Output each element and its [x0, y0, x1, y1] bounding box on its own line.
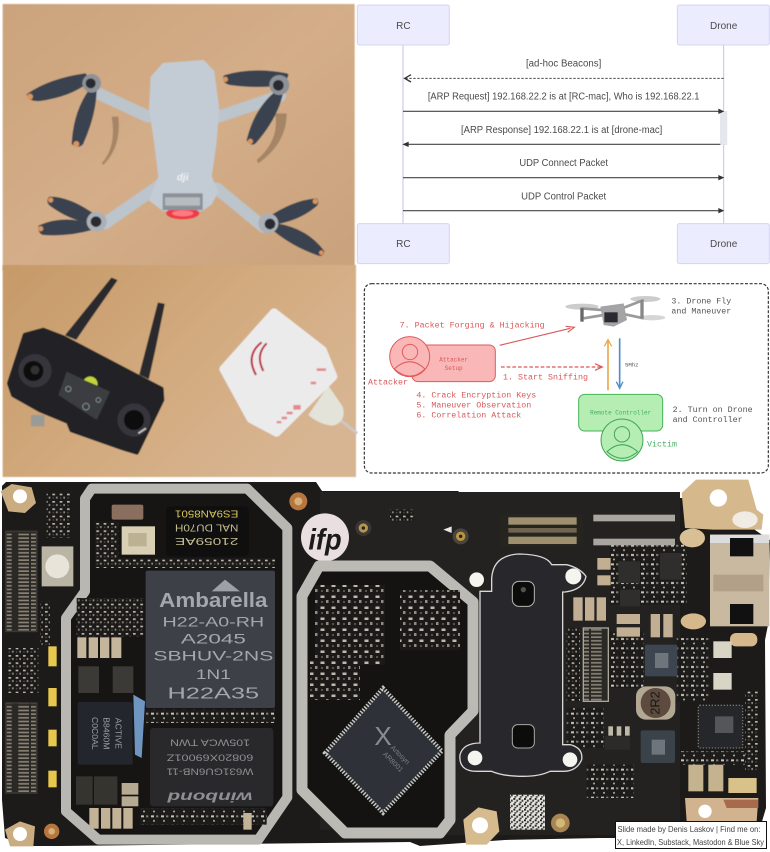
joystick left — [18, 354, 52, 387]
attack steps: 6. Correlation Attack — [416, 411, 521, 421]
message: ARP request: [ARP Request] 192.168.22.2 is at [RC-mac], Who is 192.168.22.1 — [428, 92, 700, 103]
small chips top — [618, 553, 682, 606]
Winbond chip: 60820X69001Z — [166, 752, 253, 762]
photo: circuit board — [1, 480, 770, 846]
attack steps — [416, 390, 536, 421]
rubber thermal pad with outline — [460, 554, 586, 776]
power chip 1 — [645, 645, 677, 676]
SMD fields — [390, 510, 758, 798]
router logo — [252, 342, 267, 375]
SMD field inside frame 2 — [310, 585, 460, 700]
photo: drone on wooden table — [3, 4, 355, 271]
mini drone — [565, 296, 665, 327]
label: turn on: and Controller — [673, 415, 743, 425]
shield frame 2 — [302, 566, 473, 833]
attack steps: 5. Maneuver Observation — [416, 401, 531, 411]
label: turn on — [673, 405, 753, 425]
QFP chip — [325, 688, 442, 813]
drone shadows — [102, 113, 287, 165]
RC top box: RC — [396, 21, 411, 32]
drone camera and LED — [163, 193, 203, 219]
label: victim: Victim — [647, 440, 677, 450]
Ambarella chip: H22-A0-RH — [162, 614, 264, 630]
message: ARP response: [ARP Response] 192.168.22.1 is at [drone-mac] — [461, 125, 663, 136]
top chip: NAL DU70H — [175, 522, 238, 533]
tan capacitor — [112, 505, 143, 520]
router vents — [277, 368, 326, 423]
sequence diagram — [357, 5, 769, 264]
Active-Semi chip: B8460M — [102, 717, 112, 749]
downlink arrow — [616, 338, 623, 388]
capacitors top — [573, 558, 673, 637]
router body — [223, 312, 333, 433]
Winbond chip: winbond — [167, 790, 252, 806]
top chip: ES9AN8501 — [174, 508, 238, 519]
right top gold tab — [680, 480, 763, 547]
left section — [1, 484, 371, 846]
crystal — [122, 526, 155, 555]
logo circle — [301, 513, 349, 561]
remote controller box — [579, 394, 663, 431]
dark copper right half tint — [320, 492, 680, 835]
Ambarella chip: A2045 — [181, 630, 246, 646]
white pads — [713, 641, 732, 690]
gold pads — [44, 492, 307, 839]
bottom right gold tab — [685, 798, 758, 821]
propellers — [28, 72, 323, 254]
tact button — [42, 546, 73, 586]
router cable — [340, 420, 357, 433]
gold pads right — [681, 613, 757, 646]
Active-Semi chip: ACTIVE — [113, 718, 123, 749]
QR data matrix — [510, 795, 545, 830]
yellow capacitors — [48, 646, 57, 787]
connector pad strips — [593, 515, 675, 545]
Drone bottom box: Drone — [710, 239, 738, 250]
message: UDP connect: UDP Connect Packet — [519, 158, 608, 169]
Ambarella chip: 1N1 — [196, 666, 231, 682]
attacker icon — [390, 337, 430, 377]
lifelines — [403, 43, 724, 225]
label: turn on: 2. Turn on Drone — [673, 405, 753, 415]
message: ARP response — [402, 125, 720, 147]
small power chips — [78, 666, 133, 693]
SOT chip — [605, 726, 630, 750]
logo circle: ifp — [308, 524, 342, 557]
uplink arrow — [604, 340, 612, 390]
bottom right capacitors — [688, 765, 757, 793]
controller body — [9, 330, 162, 452]
bottom mounting tab — [463, 807, 499, 845]
top chip: 21059AE — [174, 535, 238, 546]
sniffing arrow — [501, 364, 602, 370]
board-to-board connector — [500, 514, 583, 547]
FPC connectors left — [6, 531, 37, 793]
label: 5MHz: 5Mhz — [625, 362, 639, 369]
Ambarella chip: Ambarella — [159, 589, 268, 612]
Drone top box: Drone — [710, 21, 738, 32]
message: ad-hoc beacons: [ad-hoc Beacons] — [526, 58, 602, 69]
joystick right — [117, 403, 151, 437]
controller label — [58, 372, 110, 420]
bottom passives — [76, 776, 252, 830]
top chip — [166, 506, 249, 556]
label: start sniffing: 1. Start Sniffing — [503, 372, 588, 382]
power chip 2 — [641, 730, 675, 763]
QFP chip: AR8001 — [381, 751, 404, 774]
Winbond chip — [150, 728, 273, 806]
Active-Semi chip: C0C0AL — [90, 717, 100, 750]
attack flow diagram — [364, 284, 768, 473]
router plug — [308, 386, 344, 426]
forging arrow — [500, 326, 574, 345]
bottom-left mounting tab — [5, 821, 35, 846]
USB plug — [31, 415, 44, 426]
label: drone fly: and Maneuver — [671, 306, 731, 316]
message: UDP connect — [403, 158, 724, 180]
Ambarella chip — [146, 571, 275, 708]
2R2 inductor: 2R2 — [648, 691, 662, 715]
sensor slot top — [512, 581, 534, 606]
message: UDP control — [403, 191, 724, 213]
RC bottom box: RC — [396, 239, 411, 250]
right section — [390, 480, 769, 845]
bottom gold pad — [551, 814, 570, 832]
Drone bottom box — [677, 224, 769, 264]
FPC connector right — [583, 628, 608, 701]
SMD field inside frame 1 — [77, 521, 275, 825]
label: packet forging: 7. Packet Forging & Hijacking — [400, 321, 545, 331]
drone arms — [97, 93, 280, 227]
Winbond chip: W631GU6NB-11 — [167, 767, 253, 777]
label: attacker: Attacker — [368, 378, 408, 388]
attacker setup box: Setup — [445, 365, 463, 372]
board outline — [2, 482, 770, 846]
propeller tips — [27, 77, 324, 255]
tan capacitor row — [77, 637, 121, 658]
dashed frame — [364, 284, 768, 473]
blue thermal residue — [133, 695, 337, 806]
USB connector — [710, 535, 769, 626]
antenna connector 2 — [443, 526, 469, 544]
motors — [82, 74, 289, 233]
remote controller box: Remote Controller — [590, 410, 652, 417]
wood background — [3, 4, 355, 271]
shield frame 1 — [66, 489, 287, 840]
RC top box — [357, 5, 449, 45]
sensor slot bottom — [512, 725, 534, 748]
SMD field left — [8, 493, 70, 693]
Ambarella chip: H22A35 — [167, 686, 259, 703]
QFP chip: X — [374, 721, 392, 751]
Winbond chip: 105WCA TWN — [170, 737, 250, 747]
attacker setup box: Attacker — [439, 357, 468, 364]
Drone top box — [677, 5, 769, 45]
photo: remote controller and router — [3, 265, 357, 477]
credit box — [616, 822, 766, 848]
top-left mounting tab — [1, 484, 36, 513]
attack steps: 4. Crack Encryption Keys — [416, 390, 536, 400]
message: ad-hoc beacons — [405, 58, 724, 82]
Ambarella chip: SBHUV-2NS — [153, 648, 273, 664]
dji logo: dji — [177, 173, 189, 184]
message: UDP control: UDP Control Packet — [521, 191, 606, 202]
message: ARP request — [403, 92, 724, 114]
RC bottom box — [357, 224, 449, 264]
QFP chip: Artosyn — [389, 745, 411, 766]
label: drone fly — [671, 296, 731, 316]
activation bar — [720, 111, 727, 145]
Active-Semi chip — [78, 702, 133, 765]
antenna connector — [355, 520, 371, 536]
victim icon — [601, 419, 643, 461]
credit text — [617, 824, 765, 847]
wood background — [3, 265, 356, 477]
2R2 inductor — [636, 686, 675, 720]
drone body — [150, 61, 218, 210]
attacker setup box — [412, 345, 495, 382]
label: drone fly: 3. Drone Fly — [671, 296, 731, 306]
QFN chip — [698, 705, 743, 748]
controller antennas — [66, 278, 164, 378]
